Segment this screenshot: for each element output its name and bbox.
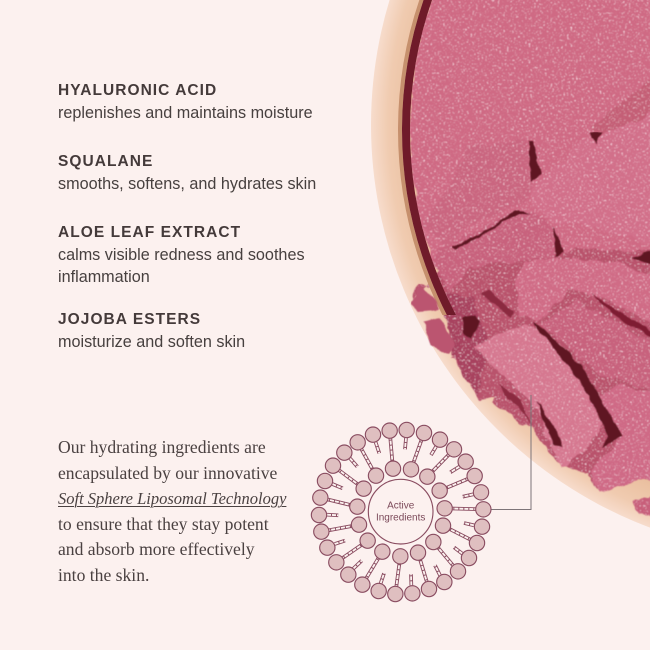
ingredient: jojoba esters: JOJOBA ESTERS <box>58 311 201 328</box>
raised chunk left <box>423 140 532 248</box>
middle chunk <box>432 212 556 292</box>
compact outer rim <box>371 0 650 555</box>
technology paragraph: encapsulated by our innovative <box>58 463 277 483</box>
debris chunk <box>633 494 650 517</box>
powder cracks <box>452 132 650 448</box>
dark debris mound <box>436 290 490 395</box>
ingredient: hyaluronic acid: replenishes and maintains moisture <box>58 104 313 122</box>
blush compact pan with pressed powder <box>371 0 650 555</box>
ingredient: squalane <box>58 153 316 193</box>
technology paragraph: into the skin. <box>58 565 149 585</box>
technology paragraph <box>58 437 286 585</box>
diagonal ridge <box>590 70 650 135</box>
main powder surface <box>410 0 650 300</box>
ingredient: hyaluronic acid: HYALURONIC ACID <box>58 82 217 99</box>
upper right slab <box>530 90 650 252</box>
right lower slab <box>516 258 650 335</box>
technology paragraph: to ensure that they stay potent <box>58 514 269 534</box>
pressed powder <box>410 0 650 517</box>
technology paragraph: and absorb more effectively <box>58 539 255 559</box>
technology paragraph: Soft Sphere Liposomal Technology <box>58 489 286 508</box>
ingredient: aloe leaf extract: calms visible redness and soothes inflammation <box>58 246 305 286</box>
ingredient: aloe leaf extract: ALOE LEAF EXTRACT <box>58 224 241 241</box>
ingredient: squalane: SQUALANE <box>58 153 153 170</box>
ingredient: squalane: smooths, softens, and hydrates skin <box>58 175 316 193</box>
bottom right slab <box>590 385 650 493</box>
technology paragraph: Our hydrating ingredients are <box>58 437 266 457</box>
ingredient: jojoba esters <box>58 311 245 351</box>
long lipid tails <box>320 431 483 594</box>
core label: Active <box>387 500 415 511</box>
short lipid tails <box>327 438 474 585</box>
liposome diagram <box>311 422 491 602</box>
outer lipid heads <box>311 422 491 602</box>
powder debris <box>411 284 455 355</box>
ingredient: hyaluronic acid <box>58 82 313 122</box>
inner rim bands <box>398 0 456 315</box>
bright front chunk <box>475 325 607 467</box>
ingredient: jojoba esters: moisturize and soften skin <box>58 333 245 351</box>
liposome diagram: Ingredients <box>376 513 425 524</box>
slab centre right <box>540 300 650 395</box>
lower powder base <box>412 250 650 493</box>
callout line <box>491 395 531 510</box>
ingredient: aloe leaf extract <box>58 224 305 286</box>
inner lipid heads <box>350 461 452 564</box>
core circle <box>368 479 433 544</box>
